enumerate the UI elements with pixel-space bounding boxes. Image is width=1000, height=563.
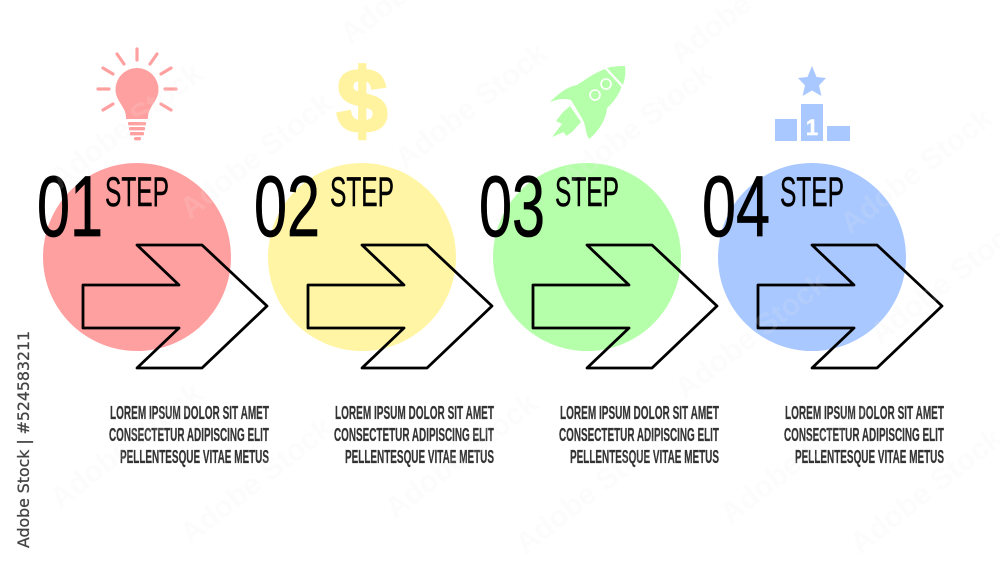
circle: yellow xyxy=(268,163,456,351)
arrow xyxy=(308,245,492,368)
icon: rocket xyxy=(550,66,625,139)
rocket windows xyxy=(590,79,611,100)
number 02: 02 xyxy=(254,159,320,255)
circle: red xyxy=(43,163,231,351)
label: step: STEP xyxy=(555,168,619,215)
description text: PELLENTESQUE VITAE METUS xyxy=(120,447,269,467)
watermark: faint diagonal marks: Adobe Stock xyxy=(44,56,209,196)
watermark: faint diagonal marks: Adobe Stock xyxy=(44,376,209,516)
label: step: STEP xyxy=(330,168,394,215)
watermark: faint diagonal marks: Adobe Stock xyxy=(714,391,879,531)
arrow xyxy=(758,245,942,368)
icon: light bulb xyxy=(98,49,176,140)
icon: dollar sign: $ xyxy=(337,52,387,152)
description text xyxy=(784,403,944,467)
icon: podium with star xyxy=(775,66,850,141)
watermark: faint diagonal marks: Adobe Stock xyxy=(509,421,674,561)
number 01: 01 xyxy=(37,159,103,255)
label: step: STEP xyxy=(780,168,844,215)
description text xyxy=(334,403,494,467)
description text: LOREM IPSUM DOLOR SIT AMET xyxy=(110,403,269,423)
watermark: faint diagonal marks: Adobe Stock xyxy=(669,266,834,406)
arrow xyxy=(83,245,267,368)
description text: CONSECTETUR ADIPISCING ELIT xyxy=(109,425,269,445)
watermark: faint diagonal marks: Adobe Stock xyxy=(834,101,999,241)
watermark: faint diagonal marks: Adobe Stock xyxy=(174,86,339,226)
step 3 xyxy=(479,66,719,467)
watermark: faint diagonal marks: Adobe Stock xyxy=(389,36,554,176)
description text xyxy=(109,403,269,467)
number 03: 03 xyxy=(479,159,545,255)
icon: podium with star: 1 xyxy=(806,115,818,140)
arrow xyxy=(533,245,717,368)
description text: CONSECTETUR ADIPISCING ELIT xyxy=(559,425,719,445)
description text xyxy=(559,403,719,467)
step 4 xyxy=(702,66,944,467)
description text: PELLENTESQUE VITAE METUS xyxy=(570,447,719,467)
watermark: faint diagonal marks: Adobe Stock xyxy=(554,56,719,196)
description text: LOREM IPSUM DOLOR SIT AMET xyxy=(560,403,719,423)
description text: PELLENTESQUE VITAE METUS xyxy=(345,447,494,467)
description text: CONSECTETUR ADIPISCING ELIT xyxy=(334,425,494,445)
circle: green xyxy=(493,163,681,351)
step 1 xyxy=(37,49,269,467)
description text: LOREM IPSUM DOLOR SIT AMET xyxy=(335,403,494,423)
step 2 xyxy=(254,52,494,467)
number 04: 04 xyxy=(702,159,770,255)
watermark: stock credit: Adobe Stock | #524583211 xyxy=(14,331,33,548)
label: step: STEP xyxy=(105,168,169,215)
watermark: faint diagonal marks: Adobe Stock xyxy=(379,386,544,526)
watermark: faint diagonal marks: Adobe Stock xyxy=(174,411,339,551)
circle: blue xyxy=(718,163,906,351)
